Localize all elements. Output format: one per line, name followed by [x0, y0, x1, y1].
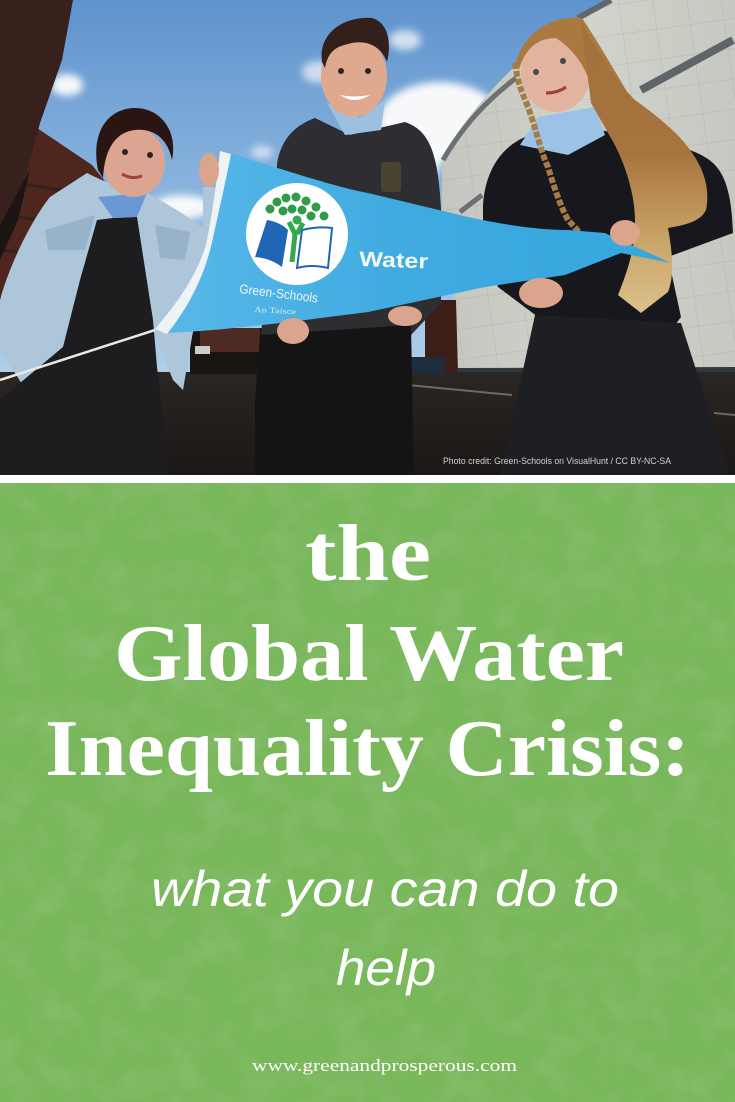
girl left	[0, 108, 217, 475]
left brick building	[0, 0, 120, 340]
pennant label: Water: Water	[359, 248, 429, 273]
skirt	[500, 315, 730, 475]
girl right	[483, 18, 733, 475]
photo credit: Photo credit: Green-Schools on VisualHunt / CC BY-NC-SA	[443, 456, 671, 466]
jumper	[483, 130, 733, 325]
head	[521, 32, 591, 112]
title: Inequality Crisis:	[45, 705, 690, 793]
title: the	[305, 510, 431, 598]
background street and ground	[0, 328, 735, 475]
open book	[255, 220, 332, 268]
rope	[0, 330, 155, 380]
hands on pennant	[199, 153, 640, 344]
head	[321, 35, 387, 117]
website url: www.greenandprosperous.com	[252, 1056, 517, 1075]
clouds	[51, 30, 502, 219]
collar	[520, 107, 605, 155]
title: Global Water	[114, 610, 624, 698]
braid	[515, 63, 590, 244]
denim jacket	[0, 173, 217, 392]
subtitle: help	[336, 940, 436, 996]
long hair	[581, 23, 707, 313]
pennant label: Green-Schools: Green-Schools	[239, 281, 319, 306]
jumper	[260, 118, 441, 345]
dress	[0, 217, 167, 475]
collar	[327, 100, 385, 135]
pennant flag	[155, 151, 671, 334]
tree figure	[266, 192, 328, 262]
pennant label: An Taisce: An Taisce	[254, 305, 297, 316]
collar	[98, 193, 147, 218]
panel: green title block	[0, 483, 735, 1102]
photo: children holding a Green-Schools Water pennant	[0, 0, 735, 475]
subtitle: what you can do to	[151, 861, 619, 917]
head	[103, 127, 165, 197]
boy centre	[255, 18, 441, 475]
school badge	[381, 162, 401, 192]
title	[45, 510, 690, 793]
right curved building	[425, 0, 735, 397]
subtitle	[151, 861, 619, 996]
trousers	[255, 325, 414, 475]
pennant emblem	[246, 183, 348, 285]
